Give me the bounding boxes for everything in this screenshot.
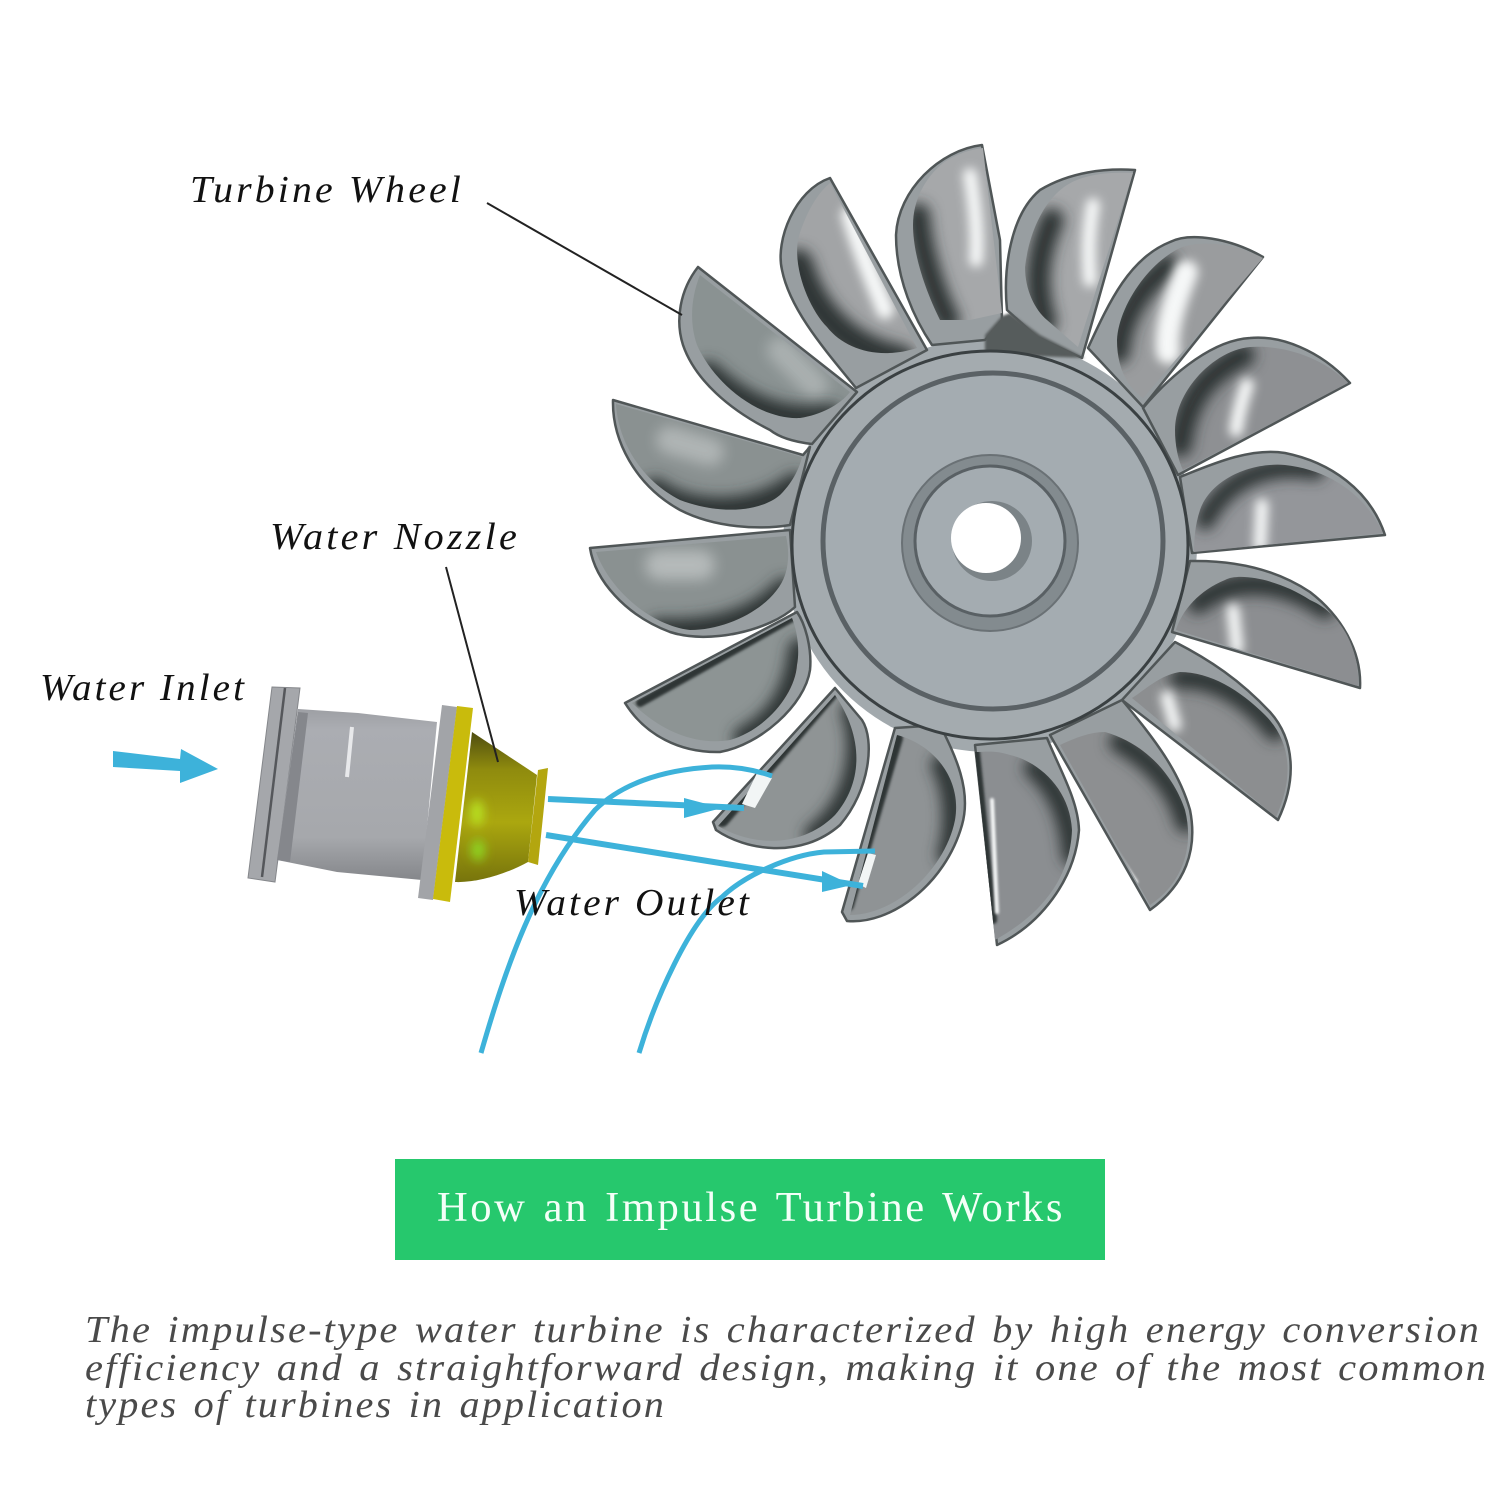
hub bbox=[792, 351, 1188, 739]
description text bbox=[85, 1309, 1488, 1426]
label: turbine wheel: Turbine Wheel bbox=[190, 169, 464, 211]
icon: inlet arrow bbox=[113, 749, 218, 783]
yellow cone bbox=[455, 732, 537, 882]
jet 2 bbox=[546, 835, 863, 886]
jet arrowhead 2 bbox=[822, 871, 852, 892]
wheel stems bbox=[783, 338, 1197, 752]
label: water inlet: Water Inlet bbox=[40, 667, 247, 709]
nozzle tip bbox=[528, 768, 548, 865]
turbine wheel bbox=[588, 144, 1386, 946]
cone glints bbox=[470, 800, 485, 861]
nozzle assembly bbox=[248, 687, 548, 902]
bucket rims bbox=[590, 145, 1385, 945]
label: water nozzle: Water Nozzle bbox=[270, 516, 520, 558]
jet notches in buckets bbox=[742, 773, 876, 888]
label: water outlet: Water Outlet bbox=[514, 882, 752, 924]
water jets bbox=[481, 767, 875, 1053]
description text: efficiency and a straightforward design, making it one of the most common bbox=[85, 1347, 1488, 1389]
bucket root wear bbox=[985, 313, 1085, 358]
title text: How an Impulse Turbine Works bbox=[437, 1185, 1065, 1231]
yellow flange rim bbox=[433, 706, 473, 902]
description text: types of turbines in application bbox=[85, 1384, 666, 1426]
nozzle body bbox=[277, 709, 437, 880]
outflow curve 2 bbox=[639, 851, 875, 1053]
outlet flange bbox=[418, 705, 457, 900]
bucket shading bbox=[119, 148, 1383, 1052]
inlet flange bbox=[248, 687, 300, 882]
description text: The impulse-type water turbine is characterized by high energy conversion bbox=[85, 1309, 1481, 1351]
outflow curve 1 bbox=[481, 767, 772, 1053]
pointer: water nozzle bbox=[446, 567, 498, 762]
pointer: turbine wheel bbox=[487, 203, 682, 315]
title banner bbox=[395, 1159, 1105, 1260]
jet 1 bbox=[548, 799, 744, 808]
jet arrowhead 1 bbox=[684, 798, 722, 818]
